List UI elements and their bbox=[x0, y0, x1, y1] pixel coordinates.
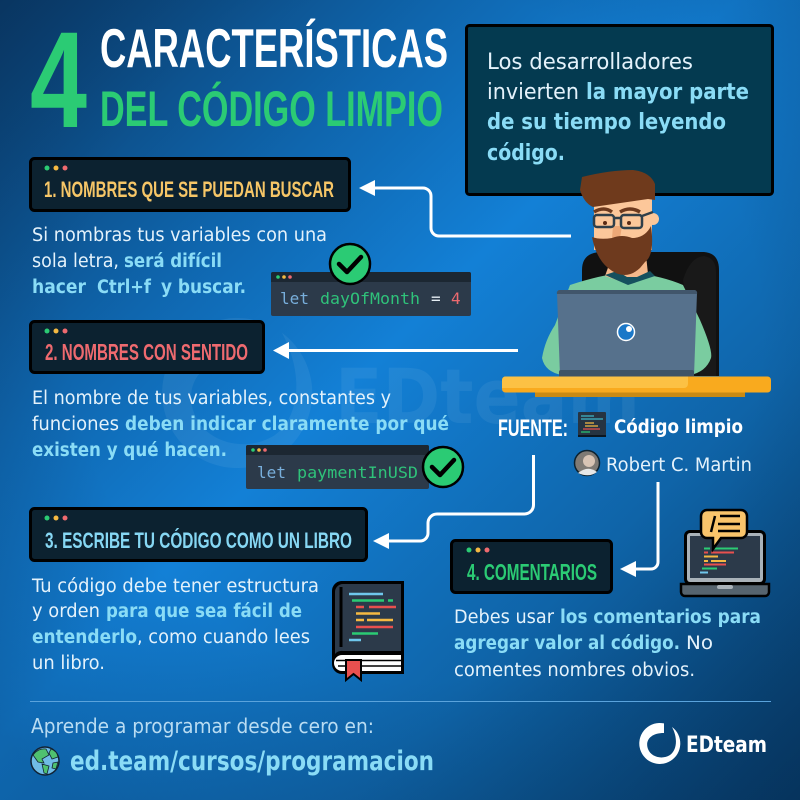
heading 4: 4. COMENTARIOS bbox=[467, 559, 597, 585]
watermark: EDteam logo: EDteam bbox=[335, 352, 640, 441]
source bbox=[498, 412, 752, 476]
text block: point 2: funciones bbox=[32, 414, 119, 435]
text block: point 4: Debes usar bbox=[454, 607, 554, 628]
icon: check 2 bbox=[423, 447, 463, 487]
panel: intro callout bbox=[466, 26, 772, 194]
icon: globe bbox=[31, 747, 59, 775]
heading 2 bbox=[30, 322, 264, 372]
panel: intro callout: de su tiempo leyendo bbox=[487, 110, 726, 135]
hair bbox=[580, 170, 655, 207]
heading 1 bbox=[30, 158, 350, 210]
neck bbox=[605, 255, 648, 284]
text block: point 1: será difícil bbox=[124, 251, 222, 272]
code snippet: dayOfMonth: 4 bbox=[451, 289, 461, 308]
heading 2: 2. NOMBRES CON SENTIDO bbox=[45, 339, 248, 365]
code snippet: dayOfMonth: let bbox=[280, 289, 309, 308]
icon: code book bbox=[332, 581, 404, 680]
text block: point 4: los comentarios para bbox=[560, 607, 761, 628]
title: DEL CÓDIGO LIMPIO bbox=[100, 81, 443, 137]
text block: point 3: un libro. bbox=[32, 653, 105, 674]
panel: intro callout: Los desarrolladores bbox=[487, 50, 693, 75]
title bbox=[30, 4, 448, 157]
text block: point 3: Tu código debe tener estructura bbox=[31, 576, 319, 597]
panel: intro callout: la mayor parte bbox=[586, 80, 749, 105]
footer: Aprende a programar desde cero en: bbox=[31, 714, 374, 738]
code snippet: dayOfMonth: = bbox=[431, 289, 441, 308]
arrow: developer to heading 1 bbox=[359, 180, 571, 236]
avatar: Robert C. Martin bbox=[574, 450, 600, 476]
text block: point 1: sola letra, bbox=[32, 251, 119, 272]
heading 3: 3. ESCRIBE TU CÓDIGO COMO UN LIBRO bbox=[45, 528, 352, 553]
heading 1: 1. NOMBRES QUE SE PUEDAN BUSCAR bbox=[44, 177, 334, 202]
glasses bbox=[594, 209, 653, 228]
arrow: source to heading 4 bbox=[620, 482, 658, 577]
arrow: developer to heading 2 bbox=[273, 342, 518, 359]
text block: point 2: deben indicar claramente por qué bbox=[125, 414, 449, 435]
text block: point 1 bbox=[32, 225, 327, 298]
text block: point 1: hacer bbox=[32, 277, 87, 298]
text block: point 3: y orden bbox=[32, 601, 100, 622]
desk bbox=[502, 376, 771, 397]
title: 4 bbox=[30, 4, 87, 157]
icon: check 1 bbox=[330, 244, 370, 284]
code snippet: paymentInUSD: let bbox=[257, 463, 286, 482]
chair bbox=[582, 252, 719, 376]
logo: EDteam: EDteam bbox=[686, 733, 767, 758]
beard bbox=[592, 226, 652, 275]
watermark: EDteam logo bbox=[162, 318, 640, 468]
panel: intro callout: código. bbox=[487, 141, 565, 166]
icon: book cover bbox=[578, 412, 606, 437]
text block: point 3: para que sea fácil de bbox=[106, 601, 302, 622]
text block: point 4: No bbox=[686, 633, 713, 654]
text block: point 4 bbox=[454, 607, 761, 681]
title: CARACTERÍSTICAS bbox=[100, 17, 448, 79]
code snippet: dayOfMonth: dayOfMonth bbox=[320, 289, 420, 308]
code snippet: paymentInUSD bbox=[246, 445, 429, 489]
text block: point 3 bbox=[31, 576, 319, 674]
logo: EDteam bbox=[639, 723, 767, 764]
arrow: source to heading 3 bbox=[373, 455, 534, 549]
panel: intro callout: invierten bbox=[487, 80, 579, 105]
icon: laptop with comment bbox=[681, 510, 769, 596]
text block: point 1: y buscar. bbox=[161, 277, 246, 298]
heading 3 bbox=[30, 508, 366, 560]
text block: point 2: existen y qué hacen. bbox=[32, 440, 227, 461]
text block: point 2: El nombre de tus variables, constantes y bbox=[32, 388, 391, 409]
heading 4 bbox=[452, 540, 612, 592]
text block: point 4: comentes nombres obvios. bbox=[454, 660, 695, 681]
text block: point 3: entenderlo bbox=[32, 627, 137, 648]
text block: point 3: , como cuando lees bbox=[137, 627, 310, 648]
footer bbox=[30, 702, 771, 777]
text block: point 1: Si nombras tus variables con una bbox=[32, 225, 327, 246]
text block: point 2 bbox=[32, 388, 449, 461]
illustration: developer at desk bbox=[502, 170, 771, 397]
source: Robert C. Martin bbox=[606, 455, 752, 476]
laptop bbox=[557, 290, 697, 377]
text block: point 1: Ctrl+f bbox=[97, 277, 152, 298]
source: Código limpio bbox=[614, 417, 743, 438]
source: FUENTE: bbox=[498, 415, 568, 442]
footer: ed.team/cursos/programacion bbox=[70, 746, 434, 777]
shirt bbox=[542, 272, 711, 375]
text block: point 4: agregar valor al código. bbox=[454, 633, 680, 654]
code snippet: dayOfMonth bbox=[271, 272, 471, 316]
face bbox=[594, 195, 659, 250]
code snippet: paymentInUSD: paymentInUSD bbox=[297, 463, 418, 482]
collar bbox=[605, 271, 655, 285]
